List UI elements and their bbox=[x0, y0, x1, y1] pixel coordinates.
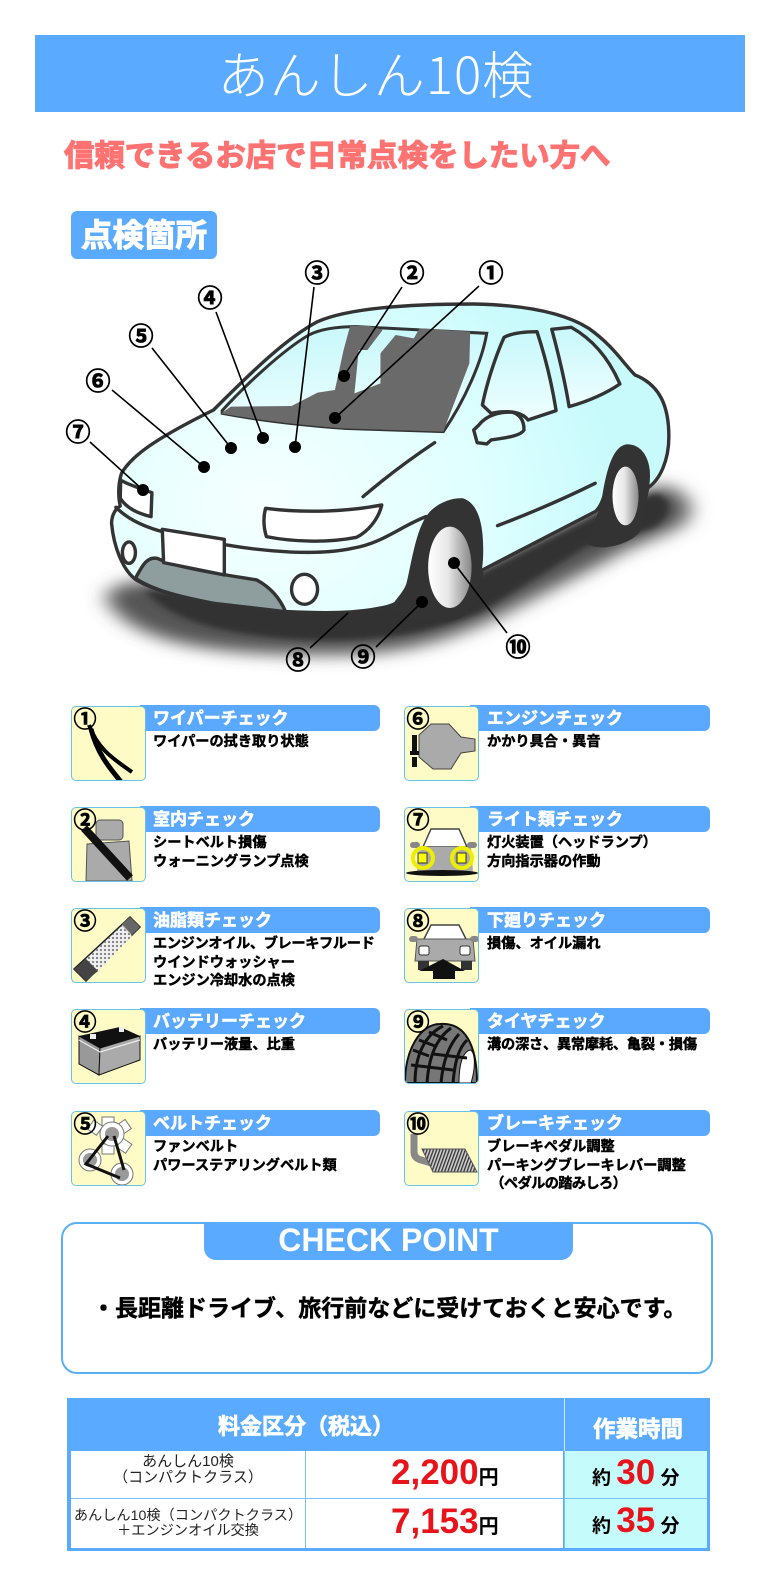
description bbox=[487, 1138, 686, 1192]
check item 9: tyres bbox=[404, 1008, 710, 1084]
car body bbox=[112, 304, 669, 613]
check item 1: wiper bbox=[71, 705, 380, 781]
callout numbers: ① bbox=[478, 254, 504, 290]
row 2 label: あんしん10検（コンパクトクラス） bbox=[74, 1508, 302, 1524]
header: price category: 料金区分（税込） bbox=[218, 1414, 394, 1439]
check item 4: battery bbox=[71, 1008, 380, 1084]
description bbox=[153, 1139, 337, 1174]
description: 損傷、オイル漏れ bbox=[487, 936, 601, 952]
icon: car with up arrow bbox=[404, 908, 479, 983]
row 1 time bbox=[564, 1451, 707, 1499]
heading: ライト類チェック bbox=[487, 810, 623, 829]
callout leader lines bbox=[90, 286, 507, 648]
shadow core bbox=[144, 493, 669, 640]
heading: 油脂類チェック bbox=[153, 911, 272, 930]
front wheel rim bbox=[428, 527, 472, 608]
row 1 label: （コンパクトクラス） bbox=[113, 1469, 263, 1486]
title banner: あんしん10検 bbox=[218, 35, 534, 109]
row 1 price bbox=[306, 1451, 563, 1499]
callout numbers: ⑩ bbox=[505, 628, 531, 664]
icon: wiper bbox=[71, 706, 146, 781]
callout numbers: ⑧ bbox=[285, 641, 311, 677]
icon: car with headlights bbox=[404, 807, 479, 882]
heading: ワイパーチェック bbox=[153, 709, 289, 728]
callout numbers bbox=[65, 254, 531, 677]
icon: dipstick bbox=[71, 908, 146, 983]
heading tab bbox=[204, 1222, 573, 1260]
heading: バッテリーチェック bbox=[153, 1012, 306, 1031]
car diagram with numbered callouts bbox=[65, 254, 705, 677]
callout numbers: ② bbox=[399, 254, 425, 290]
section badge: inspection points: 点検箇所 bbox=[81, 217, 207, 253]
row 2 time bbox=[564, 1499, 707, 1548]
check item 6: engine bbox=[404, 705, 710, 781]
description: ファンベルト bbox=[153, 1139, 238, 1155]
description: （ペダルの踏みしろ） bbox=[490, 1176, 626, 1192]
row 2 price bbox=[306, 1499, 563, 1548]
check point note: ・長距離ドライブ、旅行前などに受けておくと安心です。 bbox=[92, 1295, 686, 1321]
car illustration bbox=[105, 304, 690, 655]
check item 8: underbody bbox=[404, 907, 710, 983]
windshield bbox=[222, 327, 487, 432]
heading: 下廻りチェック bbox=[487, 911, 606, 930]
description bbox=[153, 935, 374, 989]
callout numbers: ⑤ bbox=[128, 317, 154, 353]
callout dots bbox=[137, 370, 460, 608]
panel: check point bbox=[61, 1222, 713, 1374]
heading: タイヤチェック bbox=[487, 1012, 606, 1031]
row 1 label bbox=[71, 1451, 306, 1499]
header: work time bbox=[564, 1398, 711, 1451]
row 1 price: 2,200円 bbox=[391, 1453, 499, 1492]
front side window bbox=[482, 332, 556, 420]
description bbox=[153, 834, 309, 870]
icon: fan belt bbox=[71, 1111, 146, 1186]
row 2 time: 約 35 分 bbox=[592, 1501, 680, 1540]
fog lamps bbox=[122, 542, 135, 563]
main headlight bbox=[264, 505, 382, 541]
callout numbers: ⑦ bbox=[65, 413, 91, 449]
icon: seat belt bbox=[71, 807, 146, 882]
price table bbox=[67, 1398, 710, 1551]
description: 灯火装置（ヘッドランプ） bbox=[487, 835, 657, 851]
description: エンジン冷却水の点検 bbox=[153, 973, 295, 989]
description: バッテリー液量、比重 bbox=[153, 1037, 295, 1053]
icon: tyre bbox=[404, 1009, 479, 1084]
description bbox=[487, 834, 657, 870]
body creases bbox=[363, 443, 435, 497]
lower grille bbox=[135, 558, 285, 612]
check item 5: belts bbox=[71, 1110, 380, 1186]
callout numbers: ⑨ bbox=[350, 638, 376, 674]
check item 2: interior bbox=[71, 806, 380, 882]
front tyre bbox=[392, 498, 483, 622]
rear wheel bbox=[586, 446, 650, 547]
description: かかり具合・異音 bbox=[487, 734, 601, 750]
row 1 time: 約 30 分 bbox=[592, 1453, 680, 1492]
rear side window bbox=[552, 327, 620, 407]
description: パーキングブレーキレバー調整 bbox=[487, 1158, 686, 1174]
description: シートベルト損傷 bbox=[153, 835, 267, 851]
subtitle: 信頼できるお店で日常点検をしたい方へ bbox=[64, 139, 610, 173]
heading: エンジンチェック bbox=[487, 709, 623, 728]
description: ワイパーの拭き取り状態 bbox=[153, 734, 309, 750]
description: パワーステアリングベルト類 bbox=[153, 1158, 337, 1174]
icon: brake pedal bbox=[404, 1111, 479, 1186]
description: ウインドウォッシャー bbox=[153, 954, 295, 970]
rear wheel rim bbox=[612, 467, 639, 525]
check item 3: fluids bbox=[71, 907, 380, 989]
heading tab: CHECK POINT bbox=[278, 1222, 499, 1258]
license plate bbox=[162, 529, 224, 575]
row 2 label: ＋エンジンオイル交換 bbox=[117, 1523, 259, 1539]
check item 10: brakes bbox=[404, 1110, 710, 1192]
description: 溝の深さ、異常摩耗、亀裂・損傷 bbox=[487, 1037, 697, 1053]
description: ウォーニングランプ点検 bbox=[153, 854, 309, 870]
row 2 price: 7,153円 bbox=[391, 1502, 499, 1541]
heading: 室内チェック bbox=[153, 810, 255, 829]
icon: engine bbox=[404, 706, 479, 781]
heading: ベルトチェック bbox=[153, 1114, 272, 1133]
door mirror bbox=[474, 412, 524, 444]
row 1 label: あんしん10検 bbox=[142, 1453, 234, 1470]
description: 方向指示器の作動 bbox=[487, 854, 601, 870]
icon: battery bbox=[71, 1009, 146, 1084]
check item 7: lights bbox=[404, 806, 710, 882]
callout numbers: ⑥ bbox=[85, 362, 111, 398]
description: ブレーキペダル調整 bbox=[487, 1139, 615, 1155]
callout numbers: ③ bbox=[304, 254, 330, 290]
callout numbers: ④ bbox=[197, 279, 223, 315]
section badge: inspection points bbox=[71, 211, 217, 259]
car interior seen through windshield bbox=[221, 326, 470, 432]
ground shadow bbox=[105, 485, 690, 655]
left headlight bbox=[120, 480, 152, 517]
header: work time: 作業時間 bbox=[593, 1417, 683, 1442]
row 2 label bbox=[71, 1499, 306, 1548]
title banner bbox=[35, 35, 745, 112]
description: エンジンオイル、ブレーキフルード bbox=[153, 936, 374, 952]
heading: ブレーキチェック bbox=[487, 1114, 623, 1133]
